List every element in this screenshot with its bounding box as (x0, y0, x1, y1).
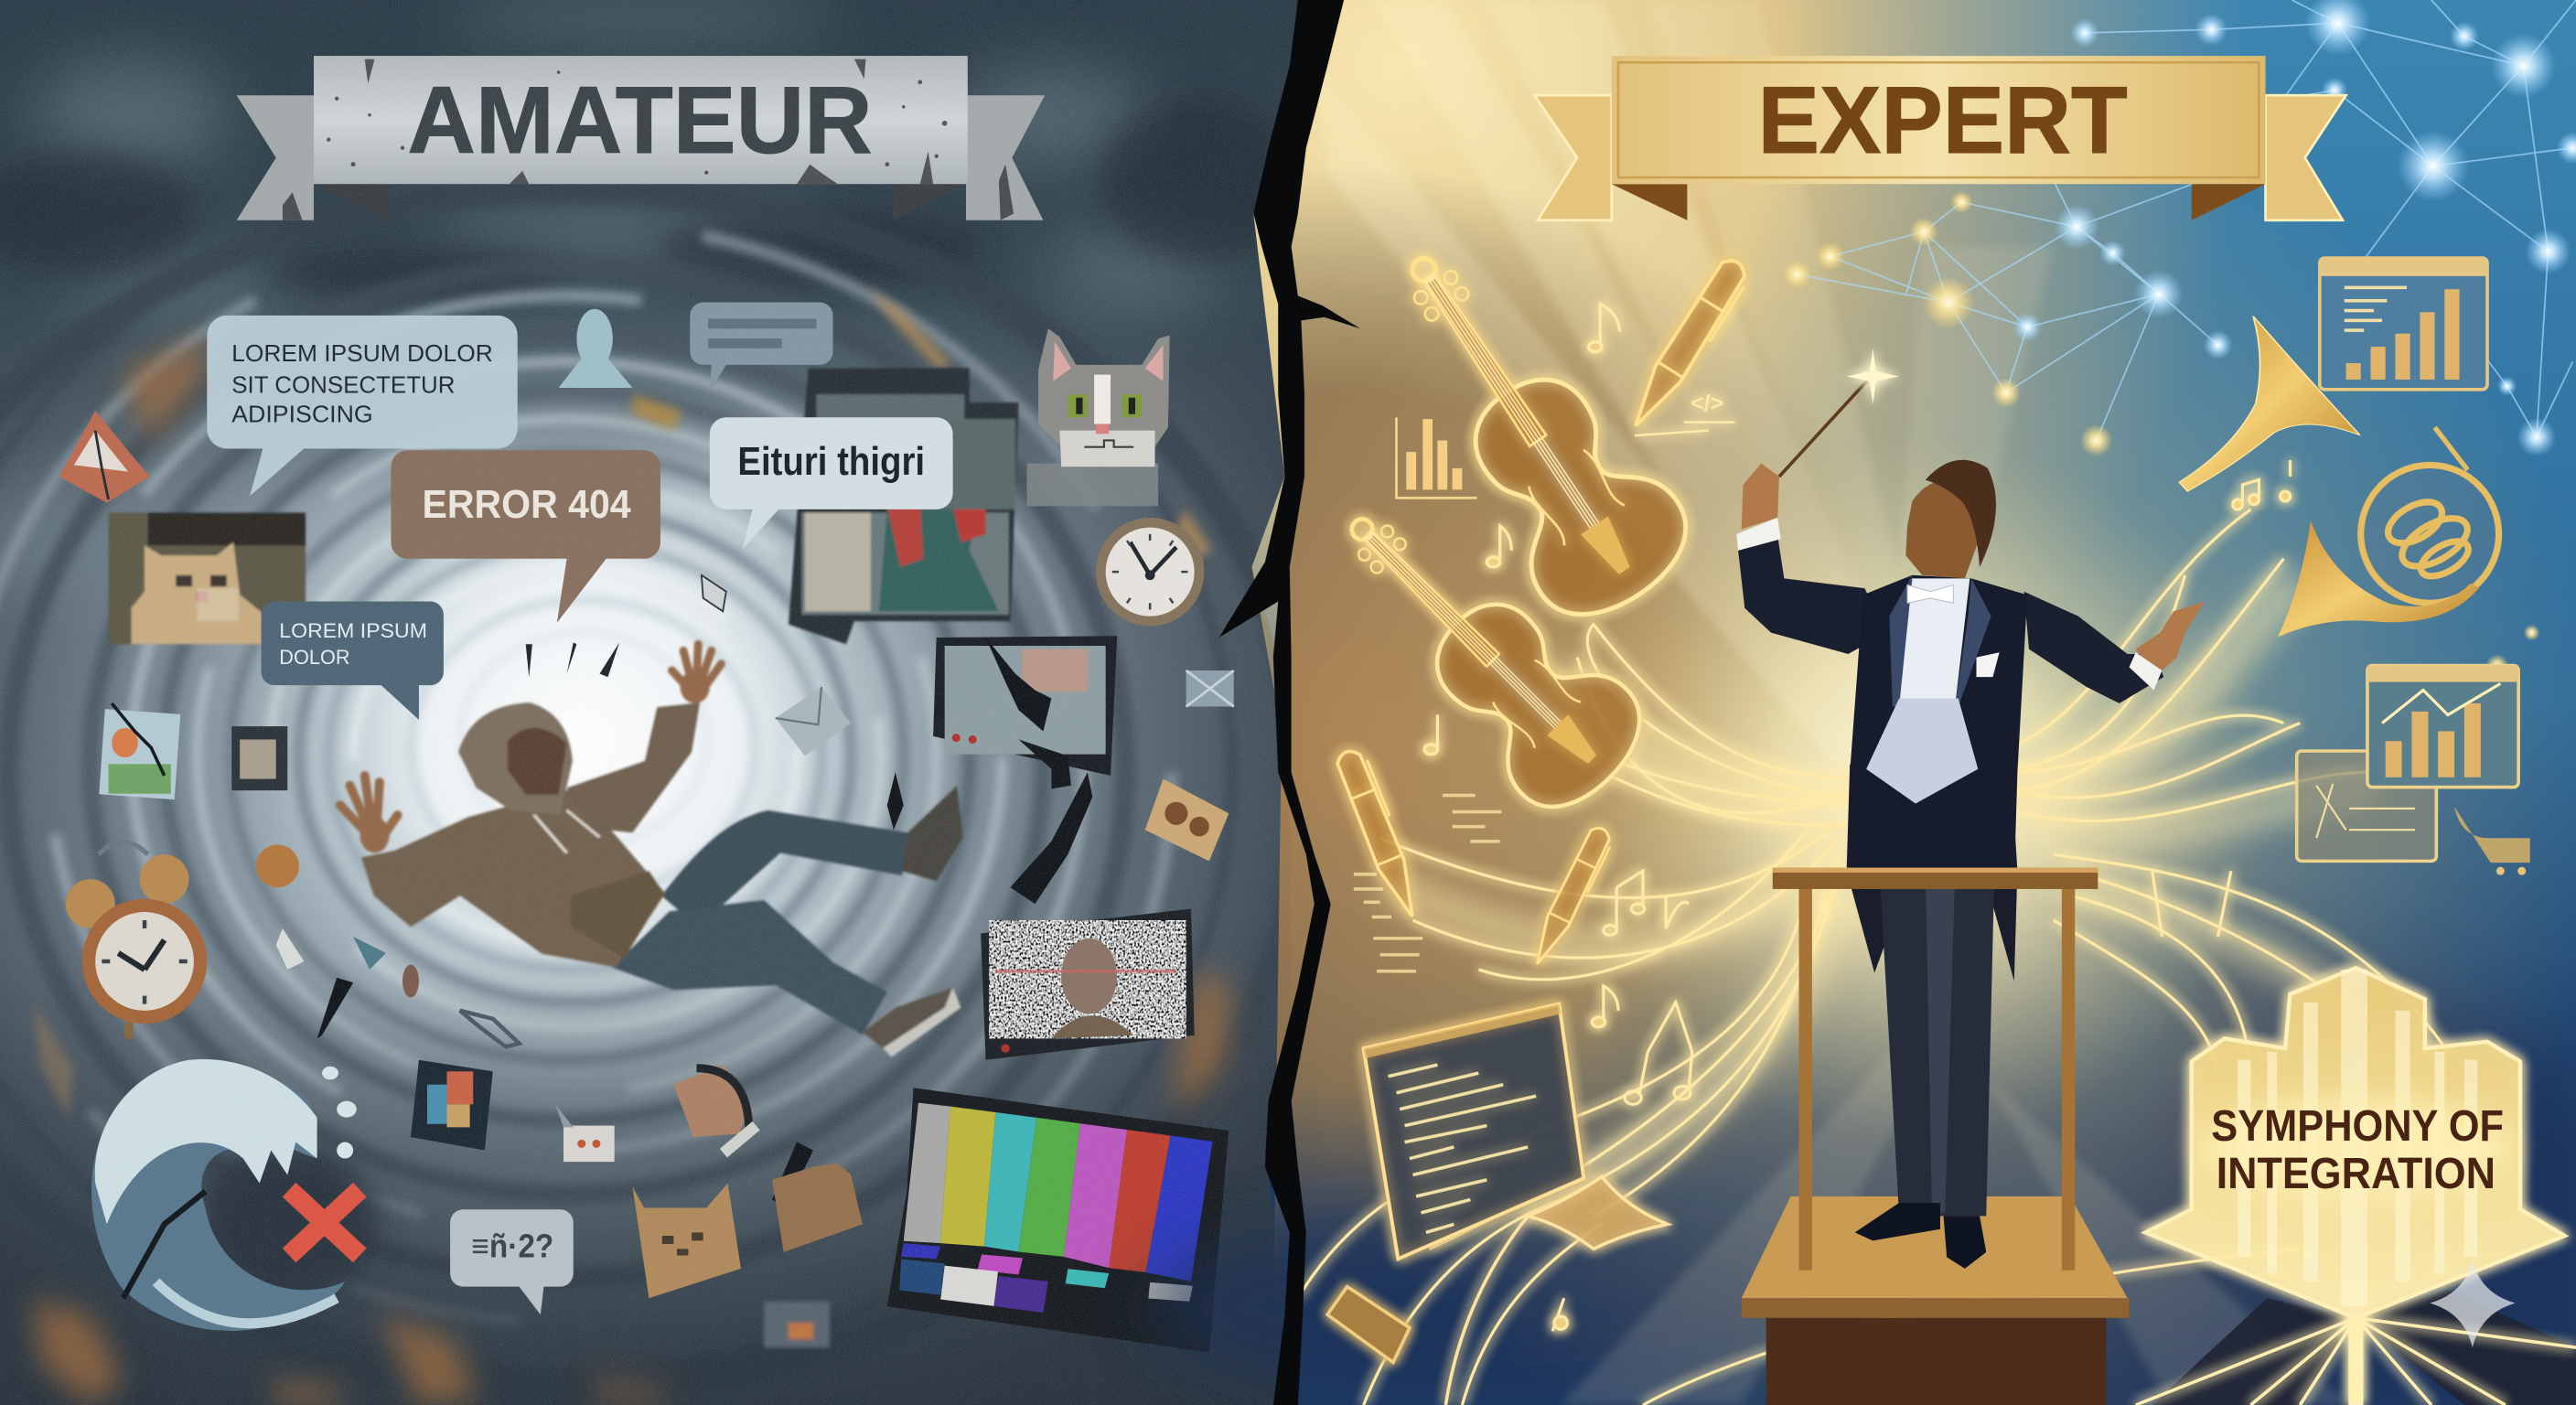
image: broken monitor (933, 636, 1117, 788)
left cuff and hand (1736, 518, 1781, 551)
speech bubble: garbled symbols (450, 1209, 574, 1314)
icon: cracked wave (91, 1059, 357, 1331)
panel: amateur vortex side (0, 0, 1364, 1405)
icon: violin upper (1349, 215, 1709, 639)
icon: folder (772, 1164, 863, 1252)
icon: person silhouette (559, 309, 632, 388)
vest (1866, 699, 1978, 803)
background: gold to blue gradient (1150, 0, 2576, 1405)
icon: pen upper with code tag (1623, 254, 1753, 435)
icon: alarm clock (66, 842, 207, 1038)
panel: browser chart top right (2320, 258, 2487, 390)
speech bubble: lorem ipsum long (207, 316, 518, 497)
noise texture over amateur side (0, 0, 1315, 1405)
small glass shards (526, 575, 726, 677)
banner: EXPERT (1534, 56, 2346, 220)
heading text: AMATEUR: AMATEUR (407, 68, 873, 174)
icon: shopping cart (2454, 807, 2530, 875)
jeans: upper leg (661, 810, 907, 927)
debris: glasses and small fragments (276, 928, 520, 1046)
icon: curled sheet music (1445, 1176, 1668, 1405)
character: falling amateur in hoodie (340, 644, 962, 1057)
music notes (1424, 304, 2291, 1331)
panel: expert conductor side (1150, 0, 2576, 1405)
image: pixel cat cream (109, 513, 306, 644)
small glitched frame (231, 726, 287, 790)
icon: bar chart outline (1397, 417, 1477, 498)
left raised arm (1738, 536, 1886, 654)
banner: AMATEUR (237, 56, 1045, 220)
organ caption text: SYMPHONY OF (2211, 1101, 2504, 1151)
icon: small chat with red dots (555, 1104, 615, 1162)
icon: orange coin (256, 844, 299, 887)
panel: code window (1364, 1004, 1583, 1259)
image: cookie card (1145, 779, 1229, 861)
jacket lapels (1889, 575, 1991, 706)
icon: pen upper with code tag: </> (1690, 391, 1723, 416)
broad light bands of the streams (1397, 592, 2415, 1199)
shoes (1855, 1203, 1940, 1240)
icon: envelope (776, 687, 851, 756)
icon: piano keys chip (1327, 1287, 1410, 1362)
crack divider (1219, 0, 1360, 1405)
image: broken colour bars TV (887, 1088, 1229, 1353)
icon: trumpet (2179, 316, 2360, 491)
speech bubble: lorem ipsum long: SIT CONSECTETUR (231, 370, 455, 398)
icon: pen lower left (1334, 746, 1428, 921)
shoes (902, 786, 962, 881)
speech bubble: grey with lines (690, 303, 833, 391)
code snippets floating (1354, 794, 1501, 973)
icon: warning sign cracked (59, 411, 149, 503)
speech bubble: Eituri thigri (710, 417, 953, 549)
glitched image fragment (789, 368, 1018, 644)
podium rail and poles (1773, 868, 2098, 1271)
tailcoat tails (1847, 764, 2017, 981)
bow tie (1907, 585, 1953, 603)
icon: wall clock (1096, 518, 1204, 626)
conductor baton with spark (1779, 349, 1899, 477)
hoodie torso (361, 788, 665, 968)
icon: paper bag cat (632, 1183, 741, 1298)
jacket torso (1850, 575, 2027, 879)
left hand (340, 776, 398, 853)
icon: pen lower (1527, 824, 1615, 970)
debris: broken mug (673, 1065, 760, 1157)
icon: french horn (2278, 427, 2499, 637)
speech bubble: lorem ipsum long: ADIPISCING (231, 401, 373, 428)
head and hair (1905, 478, 1978, 578)
speech bubble: ERROR 404 (391, 450, 660, 623)
icon: violin lower (1303, 470, 1662, 830)
pixel debris (764, 1302, 830, 1347)
organ caption text: INTEGRATION (2216, 1149, 2496, 1198)
speech bubble: lorem ipsum dolor small: LOREM IPSUM (279, 619, 427, 642)
watermark sparkle (2430, 1260, 2516, 1347)
speech bubble: ERROR 404: ERROR 404 (423, 483, 631, 527)
speech bubble: lorem ipsum long: LOREM IPSUM DOLOR (231, 339, 493, 367)
hood (458, 702, 573, 815)
conductor podium platform (1742, 1196, 2130, 1405)
image: pixel photo fragment (411, 1060, 493, 1151)
speech bubble: lorem ipsum dolor small (262, 602, 444, 720)
conductor figure (1736, 460, 2205, 1269)
pocket square (1976, 652, 2000, 677)
background: storm and swirl (0, 0, 1364, 1405)
panel: browser chart mid right (2297, 666, 2518, 861)
icon: envelope small (1186, 670, 1234, 706)
white shirt (1899, 578, 1970, 706)
speech bubble: Eituri thigri: Eituri thigri (737, 440, 925, 484)
face (508, 728, 567, 795)
network of glowing nodes (1783, 0, 2576, 677)
icon: pixel cat grey (1026, 328, 1170, 506)
debris: broken tape and shards (317, 772, 1092, 1207)
image: cracked landscape picture (99, 703, 180, 799)
trousers (1880, 871, 1994, 1216)
raised arm (567, 702, 700, 832)
image: TV static with blurred face (981, 908, 1195, 1060)
speech bubble: lorem ipsum dolor small: DOLOR (279, 646, 350, 669)
icon: red X (289, 1190, 360, 1256)
glowing music streams (1298, 509, 2448, 1405)
right arm (2024, 592, 2163, 703)
raised hand (672, 644, 721, 703)
speech bubble: garbled symbols: ≡ñ·2? (471, 1227, 553, 1264)
symphony of integration organ (2145, 968, 2564, 1318)
jeans: lower leg (612, 900, 887, 1035)
heading text: EXPERT: EXPERT (1758, 68, 2128, 174)
glowing road with text stripes (2136, 1290, 2576, 1405)
